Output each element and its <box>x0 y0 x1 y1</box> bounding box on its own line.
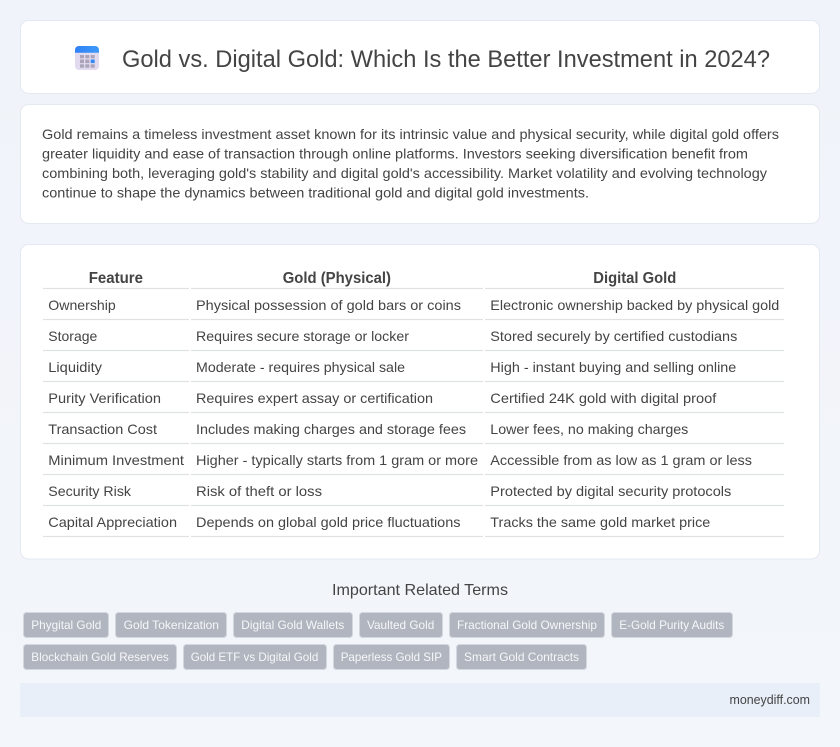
row: transaction cost: Transaction Cost <box>48 421 157 437</box>
tag: E-Gold Purity Audits <box>619 618 724 632</box>
tag <box>360 612 442 638</box>
row: security risk <box>48 483 731 499</box>
tag <box>334 644 450 670</box>
row: minimum investment: Minimum Investment <box>48 452 184 468</box>
row: minimum investment <box>48 452 752 468</box>
row: storage: Stored securely by certified custodians <box>490 328 737 344</box>
panel: header <box>20 20 820 94</box>
intro paragraph: continue to shape the dynamics between traditional gold and digital gold investments. <box>42 184 589 200</box>
row: purity verification <box>48 390 716 406</box>
table header: Digital Gold <box>593 270 676 287</box>
row: liquidity <box>48 359 737 375</box>
title: Gold vs. Digital Gold: Which Is the Better Investment in 2024? <box>122 46 770 73</box>
tag: Phygital Gold <box>31 618 101 632</box>
panel: comparison table <box>20 244 820 559</box>
tag <box>450 612 604 638</box>
tag <box>184 644 326 670</box>
row: purity verification: Requires expert assay or certification <box>196 390 433 406</box>
tag: Vaulted Gold <box>367 618 434 632</box>
row: purity verification: Purity Verification <box>48 390 161 406</box>
tag: Gold ETF vs Digital Gold <box>191 650 318 664</box>
intro paragraph: Gold remains a timeless investment asset known for its intrinsic value and physical security, while digital gold offers <box>42 126 779 142</box>
row: transaction cost: Lower fees, no making charges <box>490 421 688 437</box>
row: ownership: Physical possession of gold bars or coins <box>196 297 461 313</box>
tag <box>612 612 732 638</box>
tag: Paperless Gold SIP <box>341 650 442 664</box>
row: capital appreciation: Tracks the same gold market price <box>490 514 711 530</box>
row: storage <box>48 328 737 344</box>
tag: Smart Gold Contracts <box>464 650 579 664</box>
tag: Blockchain Gold Reserves <box>31 650 169 664</box>
row: minimum investment: Accessible from as low as 1 gram or less <box>490 452 752 468</box>
row: security risk: Risk of theft or loss <box>196 483 322 499</box>
row: storage: Requires secure storage or locker <box>196 328 409 344</box>
row: capital appreciation <box>48 514 711 530</box>
icon: calendar <box>75 46 99 70</box>
row: liquidity: Moderate - requires physical sale <box>196 359 405 375</box>
intro paragraph <box>42 126 779 200</box>
tag <box>24 644 176 670</box>
table header <box>89 270 676 287</box>
panel: introduction <box>20 104 820 224</box>
footer source: moneydiff.com <box>730 692 810 707</box>
heading: related terms: Important Related Terms <box>332 582 508 599</box>
row: security risk: Protected by digital security protocols <box>490 483 731 499</box>
row: purity verification: Certified 24K gold with digital proof <box>490 390 716 406</box>
row: transaction cost: Includes making charges and storage fees <box>196 421 466 437</box>
tag <box>234 612 352 638</box>
row: ownership: Ownership <box>48 297 116 313</box>
row: transaction cost <box>48 421 688 437</box>
tag <box>456 644 586 670</box>
footer <box>20 683 820 717</box>
row: security risk: Security Risk <box>48 483 132 499</box>
related term tags <box>24 612 732 670</box>
row: ownership: Electronic ownership backed by physical gold <box>490 297 779 313</box>
tag: Gold Tokenization <box>124 618 219 632</box>
intro paragraph: combining both, leveraging gold's stability and digital gold's accessibility. Market volatility and evolving technology <box>42 165 767 181</box>
tag: Digital Gold Wallets <box>241 618 344 632</box>
row: minimum investment: Higher - typically starts from 1 gram or more <box>196 452 478 468</box>
intro paragraph: greater liquidity and ease of transaction through online platforms. Investors seeking diversification benefit from <box>42 146 748 162</box>
row: capital appreciation: Depends on global gold price fluctuations <box>196 514 460 530</box>
tag: Fractional Gold Ownership <box>457 618 597 632</box>
table header: Feature <box>89 270 143 287</box>
tag <box>116 612 226 638</box>
row: liquidity: Liquidity <box>48 359 102 375</box>
table header: Gold (Physical) <box>283 270 391 287</box>
row: storage: Storage <box>48 328 98 344</box>
tag <box>24 612 108 638</box>
row: liquidity: High - instant buying and selling online <box>490 359 737 375</box>
row: capital appreciation: Capital Appreciation <box>48 514 177 530</box>
row: ownership <box>48 297 779 313</box>
